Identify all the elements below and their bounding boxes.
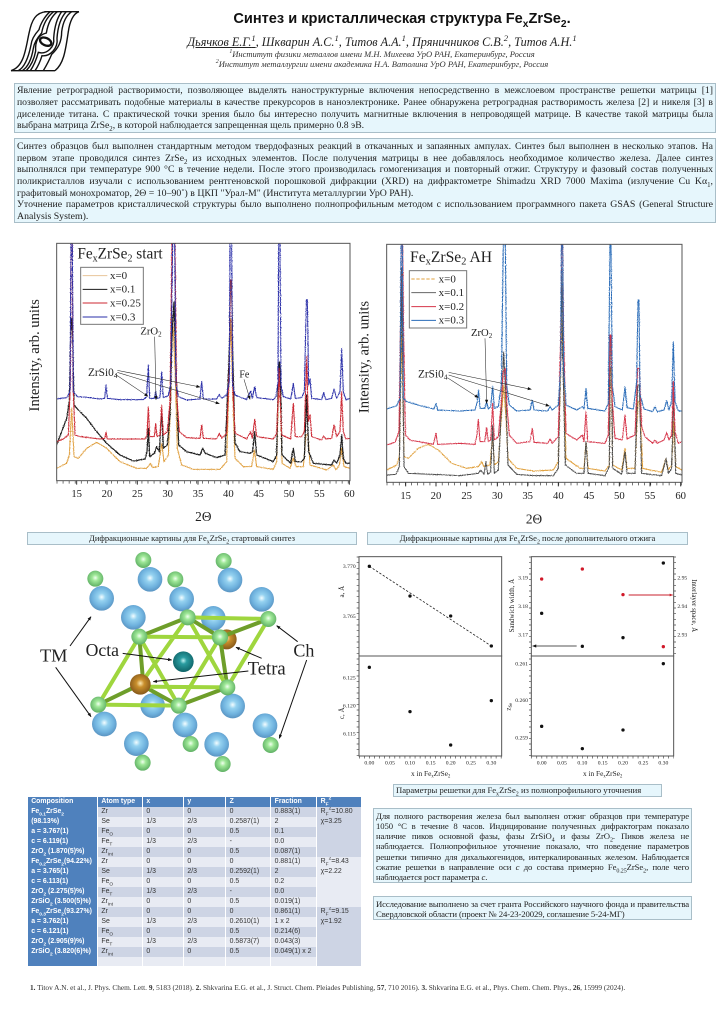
y axis titles: Interlayer space, Å — [690, 579, 698, 632]
legend — [81, 267, 143, 324]
central green atoms — [90, 609, 276, 714]
table: refinement results: 0.2610(1) — [230, 918, 259, 925]
x tick labels — [400, 491, 686, 502]
table: refinement results: 0 — [187, 808, 191, 815]
x tick labels: 0.30 — [658, 760, 668, 766]
table: refinement results: 0 — [187, 898, 191, 905]
table: refinement results: a = 3.767(1) — [31, 828, 69, 835]
right axis tick labels: 2.95 — [677, 575, 687, 581]
table: refinement results: Zr — [101, 908, 108, 915]
table: refinement results: Zr — [101, 858, 108, 865]
x tick labels: 0.10 — [577, 760, 587, 766]
table: refinement results: 0 — [230, 908, 234, 915]
structure labels: Ch — [293, 641, 314, 661]
chart title: AH — [466, 249, 492, 266]
right axis tick labels: 2.93 — [677, 632, 687, 638]
x axis titles — [411, 769, 623, 779]
panel: synthesis methods: Синтез образцов был выполнен стандартным методом твердофазных реакций в откачанных и запаянных ампулах. Синтез был выполнен в несколько этапов. На — [17, 141, 713, 152]
caption: start synthesis patterns: Дифракционные картины для FexZrSe2 стартовый синтез — [89, 533, 295, 546]
table: refinement results: (98.13%) — [31, 818, 59, 825]
table: refinement results: χ=2.22 — [321, 868, 342, 875]
x tick labels — [71, 489, 355, 500]
lower blue atoms — [92, 712, 277, 757]
x tick labels: 30 — [162, 489, 173, 500]
table: refinement results: 0 — [230, 858, 234, 865]
structure arrows — [56, 617, 307, 738]
y tick labels: 3.765 — [343, 614, 356, 620]
x axis titles: 2 — [620, 774, 623, 779]
table: refinement results: 0 — [146, 928, 150, 935]
panel: results text — [373, 808, 692, 883]
table: refinement results: 0.043(3) — [275, 938, 300, 945]
x tick labels: 0.20 — [618, 760, 628, 766]
trace: x=0 — [387, 318, 682, 472]
legend: x=0.2 — [439, 301, 464, 313]
table: refinement results: RF2=9.15 — [321, 907, 349, 917]
chart title: Fe — [410, 249, 426, 266]
x tick labels: 0.00 — [537, 760, 547, 766]
references: 1. Titov A.N. et al., J. Phys. Chem. Lett. 9, 5183 (2018). 2. Shkvarina E.G. et al., J. Struct. Chem. Pleiades Publishing, 57, 710 2016). 3. Shkvarina E.G. et al., Phys. Chem. Chem. Phys., 26, 15999 (2024). — [30, 983, 625, 992]
table: refinement results: Atom type — [101, 798, 135, 805]
chart title: ZrSe — [431, 249, 461, 266]
table: refinement results: 1/3 — [146, 838, 156, 845]
x tick labels: 50 — [614, 491, 625, 502]
table: refinement results: Zr — [101, 808, 108, 815]
x tick labels: 40 — [553, 491, 564, 502]
x tick labels: 35 — [193, 489, 203, 500]
x axis titles: ZrSe — [606, 769, 620, 778]
table: refinement results: 2/3 — [187, 888, 197, 895]
table: refinement results: 2/3 — [187, 938, 197, 945]
x axis titles: x in Fe — [583, 769, 603, 778]
panel: synthesis methods: Analysis System). — [17, 211, 88, 222]
panel: funding acknowledgement: Исследование выполнено за счет гранта Российского научного фонда и правительства — [376, 898, 689, 908]
table: refinement results: 2/3 — [187, 918, 197, 925]
phase annotations: ZrSi0 — [88, 367, 114, 379]
panel: results text: наблюдается рост параметра c. — [376, 872, 487, 882]
y tick labels: 6.120 — [343, 704, 356, 710]
table: refinement results: 1/3 — [146, 868, 156, 875]
x tick labels: 20 — [102, 489, 112, 500]
table: refinement results: 0 — [146, 808, 150, 815]
x tick labels: 0.25 — [466, 760, 476, 766]
x axis titles: 2 — [448, 774, 451, 779]
table: refinement results: Se — [101, 868, 110, 875]
table: refinement results: 1/3 — [146, 818, 156, 825]
y tick labels: 3.17 — [518, 632, 528, 638]
panel: synthesis methods: первом этапе проводился синтез ZrSe2 из исходных элементов. После получения матрицы в нее добавлялось необходимое количество железа. Далее синтез — [17, 152, 713, 165]
table: refinement results: 0.5873(7) — [230, 938, 259, 945]
y axis titles: Se — [509, 703, 514, 707]
x tick labels: 35 — [522, 491, 533, 502]
table: refinement results: c = 6.119(1) — [31, 838, 68, 845]
fit line — [369, 566, 491, 646]
chart title: x — [93, 253, 98, 264]
structure labels: Octa — [86, 640, 119, 660]
panel: synthesis methods: графитовый монохроматор, 2Θ = 10–90˚) в ЦКП "Урал-М" (Института металлургии УрО РАН). — [17, 188, 413, 199]
y tick labels: 0.260 — [515, 698, 528, 704]
table: refinement results: 2 — [275, 818, 279, 825]
tetrahedral site atom — [130, 674, 151, 695]
icon: institute logo — [11, 12, 79, 71]
table: refinement results: a = 3.762(1) — [31, 918, 69, 925]
legend: x=0 — [439, 273, 456, 285]
y axis title: Intensity, arb. units — [356, 301, 372, 413]
legend: x=0.1 — [439, 287, 464, 299]
chart title: Fe — [77, 246, 93, 263]
table: refinement results: Se — [101, 918, 110, 925]
phase annotations: ZrO — [140, 327, 158, 338]
phase annotations: 2 — [489, 332, 493, 340]
x tick labels: 0.30 — [486, 760, 496, 766]
chart title: 2 — [461, 257, 466, 268]
table: refinement results: 0.0 — [275, 888, 284, 895]
axes frame — [57, 243, 350, 481]
x tick labels: 25 — [461, 491, 472, 502]
y axis title: Intensity, arb. units — [27, 299, 43, 411]
x axis titles: x in Fe — [411, 769, 431, 778]
table: refinement results: - — [230, 838, 232, 845]
table: refinement results: 0.5 — [230, 898, 239, 905]
phase annotations: ZrSi0 — [418, 369, 444, 381]
trace: x=0.3 — [57, 243, 350, 400]
back green atoms — [87, 552, 232, 587]
panel: introduction — [14, 83, 716, 133]
trace: x=0.1 — [387, 268, 682, 476]
table: refinement results: 0.861(1) — [275, 908, 300, 915]
trace: x=0 — [57, 318, 350, 470]
panel: introduction: выбрана матрица ZrSe2, в которой наблюдается запрещенная щель примерно 0.8 эВ. — [17, 120, 364, 133]
table: refinement results: 0 — [146, 878, 150, 885]
phase annotations: Fe — [239, 369, 250, 380]
x axis title: 2Θ — [526, 511, 543, 526]
structure labels: Tetra — [248, 658, 286, 679]
y axis titles: a, Å — [338, 586, 346, 597]
octahedra bonds — [98, 617, 268, 706]
chart: lattice parameters — [338, 557, 698, 779]
plot frames — [359, 557, 674, 756]
y axis titles: Sandwich width, Å — [508, 579, 516, 633]
upper blue atoms — [89, 567, 274, 718]
table: refinement results: - — [230, 888, 232, 895]
y tick labels: 6.115 — [343, 731, 356, 737]
panel: introduction: Явление ретроградной растворимости, позволяющее выделять наноструктурные включения непосредственно в межслоевом пространстве решетки матрицы [1] — [17, 85, 713, 96]
table: refinement results: Z — [230, 798, 234, 805]
y tick labels — [343, 564, 528, 741]
panel: results text: 1050 °С в течение 8 часов. Индицирование полученных дифрактограм показало — [376, 821, 689, 831]
table: refinement results: 2/3 — [187, 818, 197, 825]
x tick labels: 0.10 — [405, 760, 415, 766]
structure labels: TM — [40, 646, 67, 666]
legend: x=0.3 — [110, 311, 136, 323]
table: refinement results: 0.5 — [230, 928, 239, 935]
y axis titles: c, Å — [338, 708, 346, 719]
trace: x=0.25 — [57, 243, 350, 442]
table: refinement results: 0.883(1) — [275, 808, 300, 815]
y tick labels: 0.259 — [515, 735, 528, 741]
table: refinement results: 0.5 — [230, 848, 239, 855]
phase annotations: 4 — [114, 371, 118, 380]
table: refinement results: 1/3 — [146, 888, 156, 895]
x tick labels: 25 — [132, 489, 143, 500]
panel: synthesis methods: поликристаллов изучали с использованием рентгеновской порошковой дифракции (XRD) на дифрактометре Shimadzu XRD 7000 Maxima (излучение Cu Kα1, — [17, 176, 713, 189]
x tick labels: 60 — [344, 489, 355, 500]
table: refinement results: 0 — [187, 858, 191, 865]
legend: x=0.1 — [110, 284, 135, 296]
table: refinement results: 0.0 — [275, 838, 284, 845]
phase annotations: 2 — [158, 331, 162, 339]
table: refinement results: RF2=10.80 — [321, 807, 353, 817]
affiliations: 2Институт металлургии имени академика Н.А. Ватолина УрО РАН, Екатеринбург, Россия — [216, 59, 548, 69]
phase annotations — [418, 328, 549, 406]
x tick labels: 0.20 — [446, 760, 456, 766]
table: refinement results: 0 — [146, 828, 150, 835]
table: refinement results: 0.2592(1) — [230, 868, 259, 875]
diagram: crystal structure — [40, 552, 314, 772]
table: refinement results: a = 3.765(1) — [31, 868, 69, 875]
table: refinement results: 0 — [146, 908, 150, 915]
panel: funding acknowledgement — [373, 896, 692, 920]
legend: x=0.25 — [110, 297, 141, 309]
table: refinement results: y — [187, 798, 191, 805]
table: refinement results: 0 — [146, 948, 150, 955]
x tick labels: 45 — [253, 489, 264, 500]
phase annotations — [88, 327, 250, 404]
table: refinement results: Se — [101, 818, 110, 825]
table: refinement results: 0 — [187, 878, 191, 885]
back tetra atom — [217, 629, 237, 649]
table: refinement results: 1/3 — [146, 918, 156, 925]
y tick labels: 3.770 — [343, 564, 356, 570]
x tick labels: 30 — [492, 491, 503, 502]
table: refinement results: 0 — [187, 928, 191, 935]
x tick labels: 45 — [584, 491, 594, 502]
chart: FexZrSe2 start diffraction patterns — [27, 243, 355, 524]
trace: x=0.3 — [387, 243, 682, 412]
right axis tick labels — [677, 575, 687, 638]
panel: funding acknowledgement: Свердловской области (проект № 24-23-20029, соглашение 5-24-МГ) — [376, 909, 625, 919]
x tick labels: 20 — [431, 491, 441, 502]
x tick labels: 15 — [71, 489, 82, 500]
caption: start synthesis patterns — [27, 532, 357, 545]
panel: results text: наличие пиков основной фазы, фазы ZrSiO4 и фазы ZrO2. Пиков железа не — [376, 831, 689, 844]
panel: synthesis methods: Уточнение параметров кристаллической структуры было выполнено полнопрофильным методом с использованием программного пакета GSAS (General Structure — [17, 199, 713, 210]
table: refinement results: 0 — [230, 808, 234, 815]
x tick labels: 0.15 — [426, 760, 436, 766]
table: refinement results: 0 — [146, 898, 150, 905]
table: refinement results: 1 x 2 — [275, 918, 290, 925]
table: refinement results: 0.5 — [230, 878, 239, 885]
title: Синтез и кристаллическая структура FexZrSe2. — [233, 11, 571, 30]
legend — [409, 271, 467, 328]
panel: results text: сжатие решетки в направление оси c до состава примерно Fe0.25ZrSe2, поле чего — [376, 862, 689, 875]
table: refinement results: 0.881(1) — [275, 858, 300, 865]
table: refinement results: 0.5 — [230, 948, 239, 955]
x axis title: 2Θ — [195, 509, 212, 524]
affiliations — [216, 48, 548, 69]
table: refinement results: 0 — [187, 848, 191, 855]
table: refinement results: x — [146, 798, 150, 805]
tick marks — [358, 557, 675, 757]
table: refinement results: 0 — [146, 848, 150, 855]
legend: x=0 — [110, 270, 128, 282]
panel: results text: Для полного растворения железа был выполнен отжиг образцов при температуре — [376, 810, 689, 820]
y tick labels: 3.18 — [518, 604, 528, 610]
x tick labels: 0.15 — [598, 760, 608, 766]
octahedral site atom — [173, 651, 194, 672]
y tick labels: 6.125 — [343, 675, 356, 681]
lower green atoms — [135, 736, 279, 772]
chart title: start — [132, 246, 163, 263]
y axis titles — [338, 579, 698, 719]
table: refinement results: 2/3 — [187, 838, 197, 845]
x axis titles: x — [431, 774, 434, 779]
legend: x=0.3 — [439, 315, 465, 327]
structure labels — [40, 640, 314, 679]
axis direction arrows — [533, 595, 673, 646]
table: refinement results: 0.087(1) — [275, 848, 300, 855]
x tick labels: 0.00 — [364, 760, 374, 766]
x tick labels: 55 — [645, 491, 655, 502]
x tick labels — [364, 760, 668, 766]
table: refinement results: 0.5 — [230, 828, 239, 835]
panel: synthesis methods: выполнялся при температуре 900 °С в течение недели. После этого производилась гомогенизация и повторный отжиг. Структуру и фазовый состав полученных — [17, 164, 713, 175]
chart title: ZrSe — [98, 246, 128, 263]
interlayer data points — [540, 567, 665, 648]
table: refinement results: 2 — [275, 868, 279, 875]
table: refinement results: Fraction — [275, 798, 302, 805]
table: refinement results: 0.2587(1) — [230, 818, 259, 825]
chart: FexZrSe2 AH diffraction patterns — [356, 243, 686, 526]
affiliations: 1Институт физики металлов имени М.Н. Михеева УрО РАН, Екатеринбург, Россия — [229, 48, 535, 58]
table: refinement results: c = 6.121(1) — [31, 928, 69, 935]
y tick labels: 0.261 — [515, 661, 528, 667]
table: refinement results: 0.019(1) — [275, 898, 300, 905]
table: refinement results: 0.214(6) — [275, 928, 300, 935]
panel: results text: решетки типично для дихалькогенидов, интеркалированных железом. Наблюдается — [376, 852, 689, 862]
chart title: x — [426, 257, 432, 268]
x tick labels: 0.05 — [557, 760, 567, 766]
axes frame — [387, 244, 682, 482]
x tick labels: 0.05 — [385, 760, 395, 766]
x tick labels: 40 — [223, 489, 234, 500]
table: refinement results: 0.1 — [275, 828, 284, 835]
table: refinement results: c = 6.113(1) — [31, 878, 68, 885]
y axis titles: z — [505, 707, 513, 711]
table: refinement results: 0 — [146, 858, 150, 865]
chart title: 2 — [127, 253, 132, 264]
panel: introduction: позволяет рассматривать подобные материалы в качестве прекурсоров в наноэлектронике. Ранее обнаружена ретроградная растворимость железа [2] и никеля [3] в — [17, 97, 713, 108]
table: refinement results: 0 — [187, 948, 191, 955]
x tick labels: 0.25 — [638, 760, 648, 766]
table: refinement results: χ=3.25 — [321, 818, 342, 825]
caption: lattice parameters: Параметры решетки для FexZrSe2 из полнопрофильного уточнения — [396, 785, 641, 798]
y tick labels: 3.19 — [518, 575, 528, 581]
table: refinement results: RF2=8.43 — [321, 857, 349, 867]
data points — [368, 561, 665, 750]
table: refinement results: 1/3 — [146, 938, 156, 945]
x tick labels: 60 — [675, 491, 686, 502]
x axis titles: x — [603, 774, 606, 779]
x tick labels: 15 — [400, 491, 411, 502]
caption: annealed patterns: Дифракционные картины для FexZrSe2 после дополнительного отжига — [400, 533, 655, 546]
authors: Дьячков Е.Г.1, Шкварин А.С.1, Титов А.А.1, Пряничников С.В.2, Титов А.Н.1 — [187, 33, 577, 49]
table: refinement results: 0 — [187, 908, 191, 915]
panel: synthesis methods — [14, 138, 716, 223]
panel: introduction: диселениде титана. С практической точки зрения было бы интересно получить магнитные включения в непроводящей матрице. В качестве такой матрицы была — [17, 109, 713, 120]
x axis titles: ZrSe — [434, 769, 448, 778]
phase annotations: ZrO — [471, 328, 489, 339]
table: refinement results: χ=1.92 — [321, 918, 342, 925]
table: refinement results: 0.2 — [275, 878, 284, 885]
x tick labels: 55 — [314, 489, 325, 500]
table: refinement results: 0.049(1) x 2 — [275, 948, 311, 955]
trace: x=0.1 — [57, 280, 350, 465]
panel: results text: наблюдается. Полнопрофильное уточнение показало, что поведение параметров — [376, 841, 689, 851]
table: refinement results: Composition — [31, 798, 73, 805]
phase annotations: 4 — [444, 373, 448, 382]
table: refinement results — [28, 797, 361, 966]
trace: x=0.2 — [387, 243, 682, 445]
table: refinement results: 2/3 — [187, 868, 197, 875]
x tick labels: 50 — [284, 489, 294, 500]
table: refinement results: 0 — [187, 828, 191, 835]
right axis tick labels: 2.94 — [677, 604, 687, 610]
